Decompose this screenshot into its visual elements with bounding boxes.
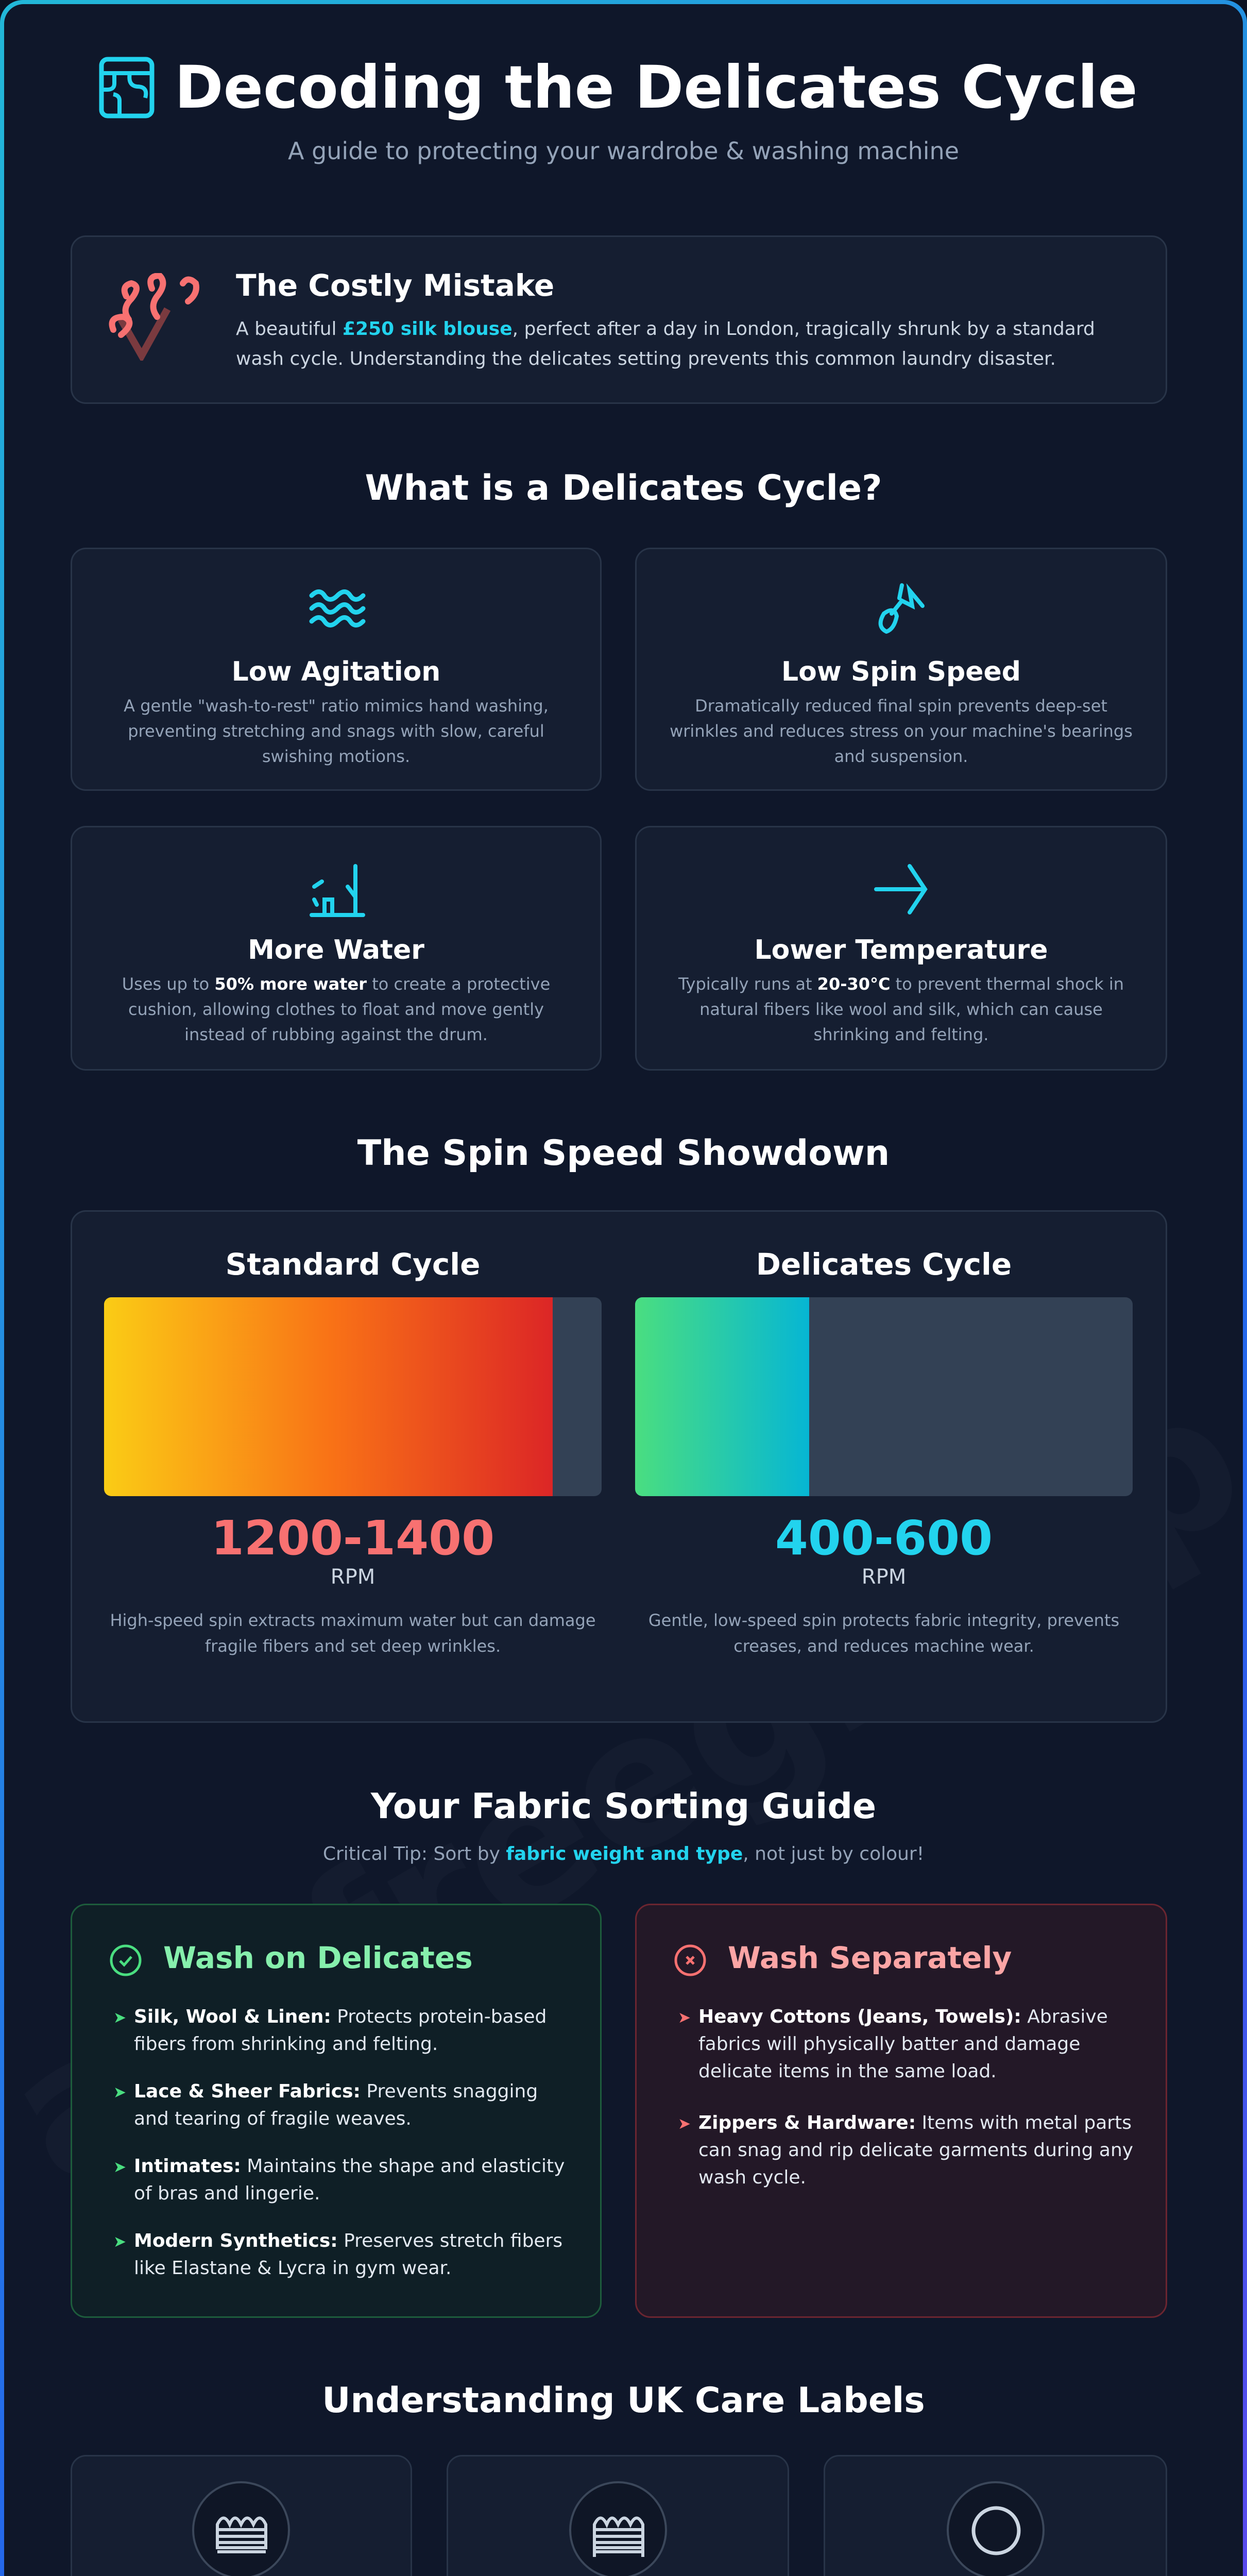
- panel: lower temperature: Lower Temperature: [755, 935, 1048, 965]
- panel: wash on delicates: ➤: [113, 2083, 126, 2102]
- list items: Silk, Wool & Linen: Protects protein-based fibers from shrinking and felting.: [134, 2006, 546, 2055]
- column: delicates: Gentle, low-speed spin protects fabric integrity, prevents creases, and reduces machine wear.: [648, 1611, 1119, 1656]
- panel: costly mistake: [71, 235, 1167, 404]
- column: delicates: 400-600: [775, 1511, 993, 1566]
- panel: more water: [71, 826, 602, 1071]
- panel: wash on delicates: ➤: [113, 2233, 126, 2251]
- column: standard: 1200-1400: [211, 1511, 494, 1566]
- heading: sorting guide: Your Fabric Sorting Guide: [371, 1786, 876, 1827]
- heading with check icon: Wash on Delicates: [163, 1940, 473, 1975]
- icon: waves: [309, 589, 366, 628]
- heading: what is: What is a Delicates Cycle?: [365, 468, 882, 509]
- panel: lower temperature: Typically runs at 20-30°C to prevent thermal shock in natural fibers like wool and silk, which can cause shrinking and felting.: [678, 974, 1124, 1044]
- icon: basin two lines: [569, 2481, 667, 2576]
- bar chart: standard: [104, 1297, 602, 1496]
- bar chart: delicates: [635, 1297, 1133, 1496]
- panel: low spin: [635, 548, 1167, 791]
- column: delicates: [635, 1247, 1133, 1656]
- icon: shrunk blouse: [109, 273, 200, 361]
- list items: ➤: [678, 2009, 691, 2027]
- panel: wash on delicates: Modern Synthetics: Preserves stretch fibers like Elastane & Lycra in gym wear.: [134, 2230, 562, 2279]
- panel: very delicate label: [447, 2455, 789, 2576]
- heading with x icon: Wash Separately: [728, 1940, 1012, 1975]
- panel: low spin: Low Spin Speed: [781, 656, 1021, 687]
- panel: low agitation: [71, 548, 602, 791]
- panel: wash on delicates: [71, 1904, 602, 2318]
- panel: wash on delicates: ➤: [113, 2158, 126, 2176]
- subtitle: A guide to protecting your wardrobe & washing machine: [288, 137, 959, 165]
- panel: low agitation: Low Agitation: [232, 656, 440, 687]
- panel: more water: More Water: [248, 935, 424, 965]
- title: Decoding the Delicates Cycle: [175, 53, 1138, 122]
- subtitle: tip: Critical Tip: Sort by fabric weight and type, not just by colour!: [323, 1843, 924, 1865]
- heading: spin speed: The Spin Speed Showdown: [357, 1133, 890, 1174]
- panel: wash on delicates: Lace & Sheer Fabrics: Prevents snagging and tearing of fragile weaves.: [134, 2081, 538, 2129]
- panel: delicate wash label: [71, 2455, 412, 2576]
- heading: care labels: Understanding UK Care Labels: [322, 2380, 925, 2421]
- icon: circle: [947, 2481, 1045, 2576]
- column: standard: [104, 1247, 602, 1656]
- panel: low agitation: A gentle "wash-to-rest" ratio mimics hand washing, preventing stretching and snags with slow, careful swishing motions.: [124, 696, 549, 766]
- panel: lower temperature: [635, 826, 1167, 1071]
- heading: The Costly Mistake: [236, 268, 554, 303]
- panel: more water: Uses up to 50% more water to create a protective cushion, allowing clothes to float and move gently instead of rubbing against the drum.: [122, 974, 550, 1044]
- panel: wash on delicates: Intimates: Maintains the shape and elasticity of bras and lingerie.: [134, 2156, 565, 2204]
- list items: ➤: [113, 2009, 126, 2027]
- icon: water level: [310, 864, 365, 917]
- panel: wash separately: [635, 1904, 1167, 2318]
- panel: wash separately: ➤: [678, 2115, 691, 2133]
- panel: low spin: Dramatically reduced final spin prevents deep-set wrinkles and reduces stress on your machine's bearings and suspension.: [670, 696, 1133, 766]
- panel: dry clean label: [824, 2455, 1167, 2576]
- panel: spin speed chart: [71, 1210, 1167, 1723]
- text block: A beautiful £250 silk blouse, perfect after a day in London, tragically shrunk by a standard wash cycle. Understanding the delicates setting prevents this common laundry disaster.: [236, 318, 1095, 369]
- icon: washing machine: [99, 57, 155, 118]
- column: delicates: Delicates Cycle: [756, 1247, 1012, 1282]
- column: delicates: RPM: [862, 1565, 906, 1589]
- column: standard: RPM: [331, 1565, 375, 1589]
- list items: Heavy Cottons (Jeans, Towels): Abrasive fabrics will physically batter and damage delicate items in the same load.: [698, 2006, 1108, 2082]
- icon: basin one line: [192, 2481, 290, 2576]
- icon: spin: [879, 583, 925, 634]
- column: standard: High-speed spin extracts maximum water but can damage fragile fibers and set deep wrinkles.: [110, 1611, 596, 1656]
- column: standard: Standard Cycle: [226, 1247, 480, 1282]
- icon: arrow: [874, 864, 928, 914]
- panel: wash separately: Zippers & Hardware: Items with metal parts can snag and rip delicate garments during any wash cycle.: [698, 2112, 1133, 2188]
